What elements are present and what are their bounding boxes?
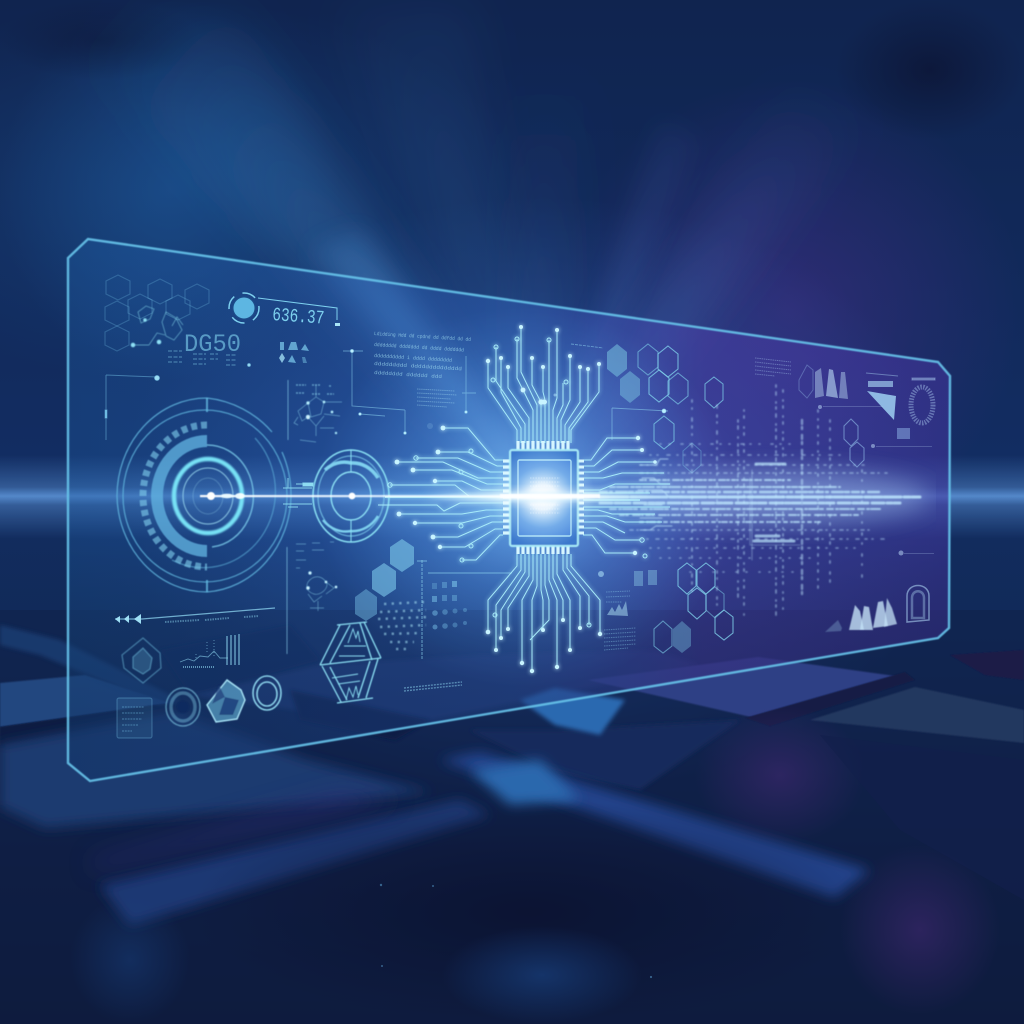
panel bright frame xyxy=(68,239,950,781)
small block xyxy=(897,428,910,439)
circuit traces: bottom xyxy=(486,554,602,673)
large concentric gauge xyxy=(117,398,291,592)
light rays from the chip xyxy=(20,0,880,497)
floor purple tile xyxy=(90,790,400,870)
floor blue spot: bottom centre xyxy=(442,926,642,1024)
floor purple glow: centre right xyxy=(695,705,865,845)
list card icon xyxy=(117,698,152,738)
floor bright part of band xyxy=(470,760,580,805)
gauge bright ring xyxy=(174,459,242,533)
small shape glyphs xyxy=(279,342,309,363)
floor tile: centre slab xyxy=(190,650,700,720)
triangle card icon xyxy=(866,373,898,420)
ring icon xyxy=(166,688,200,726)
arrow timeline xyxy=(115,608,275,624)
floor tile: lower left xyxy=(0,712,431,828)
circuit traces: top xyxy=(486,325,601,443)
network diagram top xyxy=(288,380,342,442)
floor dark strip: left xyxy=(0,703,185,745)
hexagons upper centre-right xyxy=(607,344,723,473)
mountain bar chart bottom right xyxy=(825,598,897,632)
radial glow behind chip xyxy=(315,307,735,687)
tiny text paragraph xyxy=(374,331,471,380)
hexagons lower right xyxy=(654,563,733,653)
double ring icon xyxy=(253,676,281,710)
floor purple glow: lower right xyxy=(840,845,1000,1015)
floor tile: right xyxy=(810,687,1024,743)
arch icon bottom right xyxy=(907,586,929,622)
gem icon left xyxy=(122,638,161,683)
glass panel xyxy=(68,239,950,781)
mini area chart xyxy=(607,601,628,616)
floor dark slot xyxy=(290,690,430,740)
secondary concentric gauge xyxy=(313,450,389,542)
floor rear dark slab left xyxy=(160,625,320,695)
stream: core horizontal bands xyxy=(600,480,920,522)
cube icon xyxy=(207,680,245,722)
chip left pins xyxy=(503,461,510,533)
floor tile: upper left xyxy=(0,675,170,727)
fine print block xyxy=(417,389,457,407)
dot grid cluster xyxy=(378,602,428,649)
horizontal beam xyxy=(200,492,600,500)
stream: vertical dotted columns xyxy=(692,385,862,620)
chip top pins xyxy=(518,441,568,450)
floor blue spot: bottom left xyxy=(70,896,190,1024)
chip bottom pins xyxy=(518,546,568,554)
horizontal lens flare band xyxy=(0,455,1024,539)
tiny text paragraph: dddddddd ddddddd dd dddd ddddddd xyxy=(374,342,464,353)
bracket lines upper left xyxy=(105,364,250,440)
small bars beside traces xyxy=(634,570,657,586)
mini line chart with bars xyxy=(180,634,239,667)
gauge icon and value xyxy=(229,293,340,330)
stream: outer horizontal bands xyxy=(630,444,890,572)
HUD content xyxy=(105,275,935,738)
floor blurred band: diagonal right xyxy=(440,752,870,898)
chip body xyxy=(510,450,578,546)
chip inner die xyxy=(518,460,571,536)
central flare xyxy=(420,445,662,549)
gauge segmented ring xyxy=(143,425,207,567)
fine print right of bottom traces xyxy=(604,591,636,650)
readout digits: DG50 xyxy=(184,330,241,359)
tiny text paragraph: dddddddd dddddd ddd xyxy=(374,370,442,380)
floor dark pit xyxy=(190,800,870,1024)
processor chip xyxy=(503,441,584,554)
gauge thick arc xyxy=(157,441,207,551)
floor dark seam right xyxy=(745,672,915,726)
vertical tick line xyxy=(417,560,512,660)
stream: framed blocks xyxy=(754,464,794,541)
blurred circuit-board floor xyxy=(0,610,1024,1024)
floor tile: dark centre xyxy=(470,720,740,790)
foreground dust specks xyxy=(380,884,652,978)
square and dot matrix xyxy=(432,581,467,630)
floor upper strip left xyxy=(0,625,180,705)
floor bright highlight tile xyxy=(520,688,625,735)
small labelled line ends right xyxy=(818,405,934,556)
data stream particles xyxy=(600,385,930,620)
bracket lines with paragraph xyxy=(343,349,476,434)
tiny text paragraph: Ldidding Hdd dd cpdnd dd ddfdd dd dd xyxy=(374,331,471,343)
loose dots xyxy=(427,394,604,577)
small bracket right of chip xyxy=(571,344,668,440)
floor blurred band: lower left xyxy=(100,800,490,925)
hexagon network top left xyxy=(105,275,209,351)
wireframe diamond xyxy=(320,622,381,703)
connector double lines xyxy=(283,478,313,507)
gauge outer rings xyxy=(117,398,291,592)
fine print near floor xyxy=(404,682,462,691)
top-right bar chart xyxy=(799,365,848,399)
hexagon pair right xyxy=(844,419,864,467)
filled hexagon trio lower xyxy=(355,539,414,621)
chip right pins xyxy=(578,461,584,533)
stream: left circuit fragments xyxy=(638,459,682,530)
floor tile: far right xyxy=(950,650,1024,680)
gauge icon and value: 636.37 xyxy=(272,304,325,330)
chip die grid xyxy=(530,478,560,513)
lower data panel left xyxy=(287,542,337,654)
stream: soft glow xyxy=(630,471,930,523)
tiny text paragraph: dddddddddd i dddd dddddddd xyxy=(374,353,452,364)
small caption lines xyxy=(168,351,236,365)
tiny text paragraph: ddddddddd dddddddddddddd xyxy=(374,361,462,372)
top-right text block xyxy=(755,358,791,376)
floor tile: centre right xyxy=(588,657,902,717)
radial seal icon xyxy=(911,378,935,423)
floor dark tile: right xyxy=(820,735,1024,900)
circuit traces: left xyxy=(378,426,503,562)
circuit traces: right xyxy=(583,436,670,558)
